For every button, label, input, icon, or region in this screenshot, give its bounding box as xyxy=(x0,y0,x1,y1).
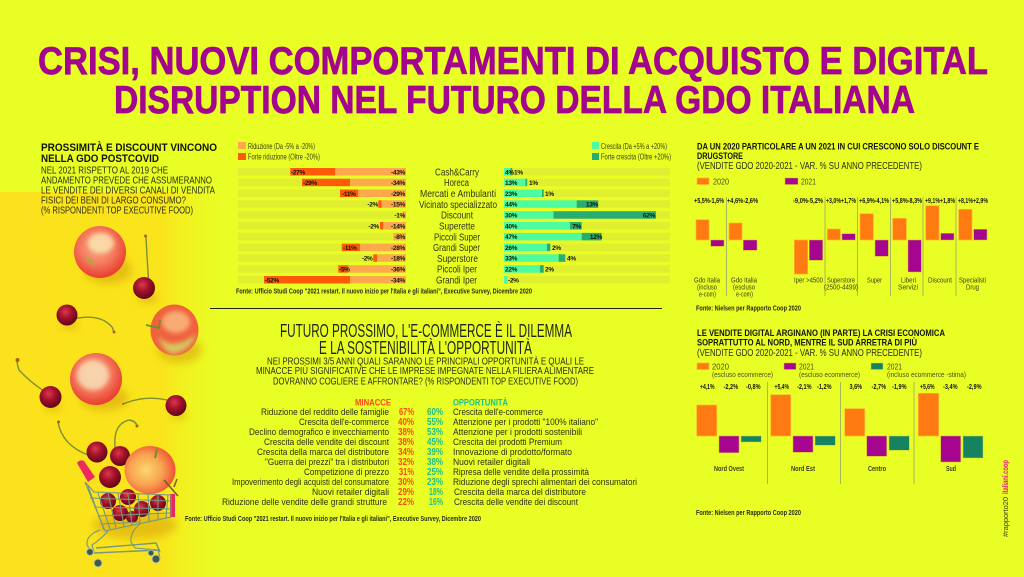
right bar values: 7% xyxy=(572,223,582,230)
photo background: yellow surface xyxy=(0,192,238,577)
text block: prossimità e discount: ANDAMENTO PREVEDE CHE ASSUMERANNO xyxy=(41,176,212,186)
apple right xyxy=(150,304,198,356)
chart: diverging bars by retail channel xyxy=(238,168,670,286)
channel labels xyxy=(419,168,497,286)
text block: prossimità e discount: LE VENDITE DEI DIVERSI CANALI DI VENDITA xyxy=(41,186,215,196)
text block: prossimità e discount: NEL 2021 RISPETTO AL 2019 CHE xyxy=(41,166,168,176)
list: minacce: Impoverimento degli acquisti del consumatore xyxy=(232,477,389,488)
category labels: Drug xyxy=(966,282,979,292)
channel labels: Piccoli Iper xyxy=(437,265,478,276)
list: minacce: Riduzione delle vendite delle grandi strutture xyxy=(222,497,387,508)
category labels: Servizi xyxy=(898,282,918,292)
chart legend: riduzione xyxy=(238,142,320,162)
right bar values: 4% xyxy=(505,169,514,176)
title xyxy=(38,40,988,122)
right bar values: 33% xyxy=(505,256,518,263)
bar values: -2,1% xyxy=(797,382,812,391)
category labels: Specialisti xyxy=(959,276,986,284)
list: opportunità: Riduzione degli sprechi alimentari dei consumatori xyxy=(453,477,637,488)
right bars: growth xyxy=(504,168,656,284)
bar values: +9,1%+1,8% xyxy=(925,196,955,205)
list: minacce: Crescita della marca del distributore xyxy=(257,447,389,458)
category labels: Liberi xyxy=(901,276,916,284)
list: minacce: 22% xyxy=(398,497,414,508)
heading: digital sales by region: (VENDITE GDO 2020-2021 - VAR. % SU ANNO PRECEDENTE) xyxy=(697,348,922,359)
left bar values: -43% xyxy=(391,169,406,176)
vertical credit: #rapporto20 xyxy=(1003,497,1010,537)
category labels xyxy=(694,276,986,298)
left bar values: -34% xyxy=(391,180,406,187)
channel labels: Grandi Super xyxy=(433,243,481,254)
bar values: +4,1% xyxy=(700,382,715,391)
left bar values: -52% xyxy=(265,277,279,284)
left bar values: -18% xyxy=(391,256,406,263)
right bar values: 62% xyxy=(643,212,656,220)
list: opportunità: 23% xyxy=(427,477,443,488)
left bar values: -2% xyxy=(367,202,379,209)
list: opportunità xyxy=(427,398,637,508)
text block: survey question: NEI PROSSIMI 3/5 ANNI QUALI SARANNO LE PRINCIPALI OPPORTUNITÀ E QUALI LE xyxy=(267,354,584,368)
heading: 2020 vs 2021 sales: DRUGSTORE xyxy=(697,151,743,162)
heading: digital sales by region xyxy=(697,328,945,359)
right bar values: 1% xyxy=(529,180,538,187)
text block: prossimità e discount: PROSSIMITÀ E DISCOUNT VINCONO xyxy=(41,141,217,154)
right bar values: 44% xyxy=(505,202,518,209)
legend: bar chart 1 xyxy=(697,178,816,186)
heading: futuro prossimo: E LA SOSTENIBILITÀ L'OPPORTUNITÀ xyxy=(319,337,532,358)
left bar values: -14% xyxy=(391,223,406,230)
bar values: -2,7% xyxy=(872,382,886,391)
bar values: -9,0%-5,2% xyxy=(793,196,823,205)
list: opportunità: Innovazione di prodotto/formato xyxy=(453,447,572,458)
legend: bar chart 2: (incluso ecommerce -stima) xyxy=(887,370,966,379)
bar values: -1,9% xyxy=(892,382,907,391)
right bar values: 1% xyxy=(545,191,554,198)
list: opportunità: 45% xyxy=(427,437,443,448)
bar chart: sales by channel xyxy=(694,196,988,298)
list: opportunità: Crescita dell'e-commerce xyxy=(453,407,543,418)
text block: prossimità e discount: FISICI DEI BENI DI LARGO CONSUMO? xyxy=(41,196,186,206)
left bar values: -1% xyxy=(394,212,406,220)
list: opportunità: Attenzione per i prodotti "100% italiano" xyxy=(453,417,598,428)
right bar values: 23% xyxy=(505,191,518,198)
legend: bar chart 2: 2021 xyxy=(799,362,814,372)
right bar values xyxy=(505,169,656,284)
right bar values: 1% xyxy=(514,169,523,176)
channel labels: Mercati e Ambulanti xyxy=(420,189,496,200)
region labels: Sud xyxy=(946,464,956,473)
legend: bar chart 2: (escluso ecommerce) xyxy=(712,370,773,379)
chart legend: crescita xyxy=(592,142,671,162)
source: channel chart: Fonte: Ufficio Studi Coop "2021 restart. Il nuovo inizio per l'Italia e gli italiani", Executive Survey, Dicembre 2020 xyxy=(236,288,532,296)
list: minacce: 38% xyxy=(398,427,414,438)
channel labels: Superette xyxy=(439,222,475,232)
list: minacce: 34% xyxy=(398,447,414,458)
list: opportunità: 60% xyxy=(427,407,443,418)
region labels: Nord Est xyxy=(791,464,815,473)
list: minacce xyxy=(222,398,414,508)
heading: 2020 vs 2021 sales: (VENDITE GDO 2020-2021 - VAR. % SU ANNO PRECEDENTE) xyxy=(697,161,922,172)
channel labels: Grandi Iper xyxy=(436,276,478,286)
region labels: Centro xyxy=(868,464,886,473)
list: minacce: 67% xyxy=(399,407,414,418)
heading: digital sales by region: LE VENDITE DIGITAL ARGINANO (IN PARTE) LA CRISI ECONOMICA xyxy=(697,328,945,339)
left bar values: -36% xyxy=(391,266,406,274)
right bar values: 40% xyxy=(505,223,518,230)
bar values: +5,6% xyxy=(920,382,935,391)
category labels: e-com) xyxy=(736,290,753,298)
illustration: fruit and shopping cart xyxy=(16,226,202,567)
text block: survey question: DOVRANNO COGLIERE E AFFRONTARE? (% RISPONDENTI TOP EXECUTIVE FOOD) xyxy=(273,376,578,388)
list: opportunità: Ripresa delle vendite della prossimità xyxy=(453,467,590,478)
left bar values: -11% xyxy=(342,191,356,198)
bar values: -2,9% xyxy=(967,382,982,391)
left bar values: -11% xyxy=(343,245,357,252)
bar values: 3,6% xyxy=(850,382,862,391)
right bar values: 13% xyxy=(505,180,518,187)
category labels: Gdo Italia xyxy=(694,276,721,284)
list: opportunità: OPPORTUNITÀ xyxy=(453,398,508,408)
legend: bar chart 2: (escluso ecommerce) xyxy=(799,370,860,379)
bar values: -3,4% xyxy=(943,382,958,391)
chart legend: crescita: Forte crescita (Oltre +20%) xyxy=(601,152,671,162)
list: minacce: 29% xyxy=(398,487,414,498)
list: opportunità: 18% xyxy=(429,487,443,498)
source: bar chart 2: Fonte: Nielsen per Rapporto Coop 2020 xyxy=(696,510,801,517)
list: opportunità: 16% xyxy=(429,497,443,508)
channel labels: Vicinato specializzato xyxy=(419,200,497,211)
text block: survey question xyxy=(256,354,594,388)
heading: 2020 vs 2021 sales xyxy=(697,142,979,172)
heading: digital sales by region: SOPRATTUTTO AL NORD, MENTRE IL SUD ARRETRA DI PIÙ xyxy=(697,336,917,348)
region labels xyxy=(714,464,956,473)
bar values: +3,0%+1,7% xyxy=(826,196,856,205)
category labels: Super xyxy=(867,276,882,284)
bar values: +5,5%-1,6% xyxy=(694,196,724,205)
list: minacce: MINACCE xyxy=(355,398,391,408)
list: minacce: Crescita delle vendite dei discount xyxy=(264,437,389,448)
list: minacce: 31% xyxy=(399,467,414,478)
vertical credit xyxy=(1000,460,1010,537)
title: DISRUPTION NEL FUTURO DELLA GDO ITALIANA xyxy=(114,79,915,122)
right bar values: 2% xyxy=(545,266,554,274)
channel labels: Discount xyxy=(441,211,473,222)
list: minacce: 40% xyxy=(398,417,414,428)
left bar values: -8% xyxy=(394,234,406,241)
left bar values: -29% xyxy=(391,191,406,198)
channel labels: Superstore xyxy=(437,254,478,265)
category labels: (escluso xyxy=(733,282,755,292)
legend: bar chart 1: 2021 xyxy=(801,178,816,186)
source: bar chart 1: Fonte: Nielsen per Rapporto Coop 2020 xyxy=(696,306,801,312)
left bar values: -28% xyxy=(391,245,406,252)
category labels: Discount xyxy=(928,276,953,284)
list: opportunità: Crescita delle vendite dei discount xyxy=(454,497,578,508)
category labels: Superstore xyxy=(827,276,855,284)
list: opportunità: 25% xyxy=(427,467,443,478)
legend: bar chart 2: 2020 xyxy=(712,362,730,372)
right bar values: 22% xyxy=(505,266,518,274)
right bar values: 47% xyxy=(505,234,518,241)
list: minacce: Competizione di prezzo xyxy=(304,467,389,478)
category labels: e-com) xyxy=(699,290,716,298)
right bar values: 26% xyxy=(505,245,518,252)
bar values: -0,8% xyxy=(746,382,761,391)
right bar values: 2% xyxy=(552,245,561,252)
heading: futuro prossimo: FUTURO PROSSIMO, L'E-COMMERCE È IL DILEMMA xyxy=(280,320,572,341)
text block: prossimità e discount: NELLA GDO POSTCOVID xyxy=(41,153,159,165)
bar values: +5,8%-8,3% xyxy=(892,196,922,205)
peach top xyxy=(74,226,126,278)
left bar values: -5% xyxy=(339,266,350,274)
left bar values: -27% xyxy=(291,169,305,176)
list: minacce: "Guerra dei prezzi" tra i distributori xyxy=(265,457,389,468)
list: opportunità: 55% xyxy=(427,417,443,428)
legend: bar chart 1: 2020 xyxy=(713,178,729,186)
list: minacce: 38% xyxy=(398,437,414,448)
left bar values xyxy=(265,169,406,284)
channel labels: Cash&Carry xyxy=(435,168,479,178)
list: minacce: 32% xyxy=(398,457,414,468)
list: minacce: 30% xyxy=(398,477,414,488)
text block: prossimità e discount xyxy=(41,141,217,216)
peach middle xyxy=(70,353,122,405)
right bar values: 4% xyxy=(567,256,576,263)
source: threats and opportunities: Fonte: Ufficio Studi Coop "2021 restart. Il nuovo inizio per l'Italia e gli italiani", Executive Survey, Dicembre 2020 xyxy=(185,516,481,523)
bar values: +5,4% xyxy=(774,382,789,391)
category labels: (incluso xyxy=(697,282,717,292)
list: opportunità: Attenzione per i prodotti sostenibili xyxy=(453,427,582,438)
list: opportunità: 39% xyxy=(427,447,443,458)
left bar values: -2% xyxy=(368,223,380,230)
bar values: -2,2% xyxy=(724,382,738,391)
list: minacce: Declino demografico e invecchiamento xyxy=(249,427,389,438)
right bar values: 13% xyxy=(586,202,599,209)
category labels: Gdo Italia xyxy=(731,276,758,284)
bar chart: sales by region xyxy=(697,382,983,484)
bar values: +6,9%-4,1% xyxy=(859,196,889,205)
list: minacce: Crescita dell'e-commerce xyxy=(299,417,389,428)
legend: bar chart 2 xyxy=(697,362,966,379)
list: opportunità: 53% xyxy=(427,427,443,438)
left bar values: -2% xyxy=(362,256,373,263)
category labels: (2500-4499) xyxy=(824,282,858,292)
channel labels: Horeca xyxy=(444,178,469,189)
left bar values: -29% xyxy=(303,180,317,187)
left bars: reductions xyxy=(264,168,406,284)
bar values xyxy=(700,382,982,391)
channel labels: Piccoli Super xyxy=(434,232,481,243)
list: minacce: Riduzione del reddito delle famiglie xyxy=(261,407,389,418)
chart legend: riduzione: Forte riduzione (Oltre -20%) xyxy=(248,152,320,162)
bar values xyxy=(694,196,988,205)
right bar values: -2% xyxy=(508,277,519,284)
category labels: Iper >4500 xyxy=(794,276,823,284)
chart legend: crescita: Crescita (Da +5% a +20%) xyxy=(601,142,667,151)
text block: survey question: MINACCE PIÙ SIGNIFICATIVE CHE LE IMPRESE IMPEGNATE NELLA FILIERA ALIMENTARE xyxy=(256,364,594,377)
list: opportunità: 38% xyxy=(427,457,443,468)
region labels: Nord Ovest xyxy=(714,464,744,473)
left bar values: -15% xyxy=(391,202,406,209)
left bar values: -34% xyxy=(391,277,406,284)
right bar values: 30% xyxy=(505,212,518,220)
list: opportunità: Crescita della marca del distributore xyxy=(454,487,586,498)
right bar values: 12% xyxy=(590,234,603,241)
text block: prossimità e discount: (% RISPONDENTI TOP EXECUTIVE FOOD) xyxy=(41,206,193,216)
legend: bar chart 2: 2021 xyxy=(887,362,902,372)
heading: futuro prossimo xyxy=(280,320,572,358)
vertical credit: italiani.coop xyxy=(1000,460,1010,494)
chart legend: riduzione: Riduzione (Da -5% a -20%) xyxy=(248,142,315,151)
list: opportunità: Crescita dei prodotti Premium xyxy=(453,437,562,448)
bar values: +8,1%+2,9% xyxy=(958,196,988,205)
bar values: +4,6%-2,6% xyxy=(727,196,758,205)
list: minacce: Nuovi retailer digitali xyxy=(312,487,389,498)
list: opportunità: Nuovi retailer digitali xyxy=(453,457,530,468)
bar values: -1,2% xyxy=(817,382,832,391)
